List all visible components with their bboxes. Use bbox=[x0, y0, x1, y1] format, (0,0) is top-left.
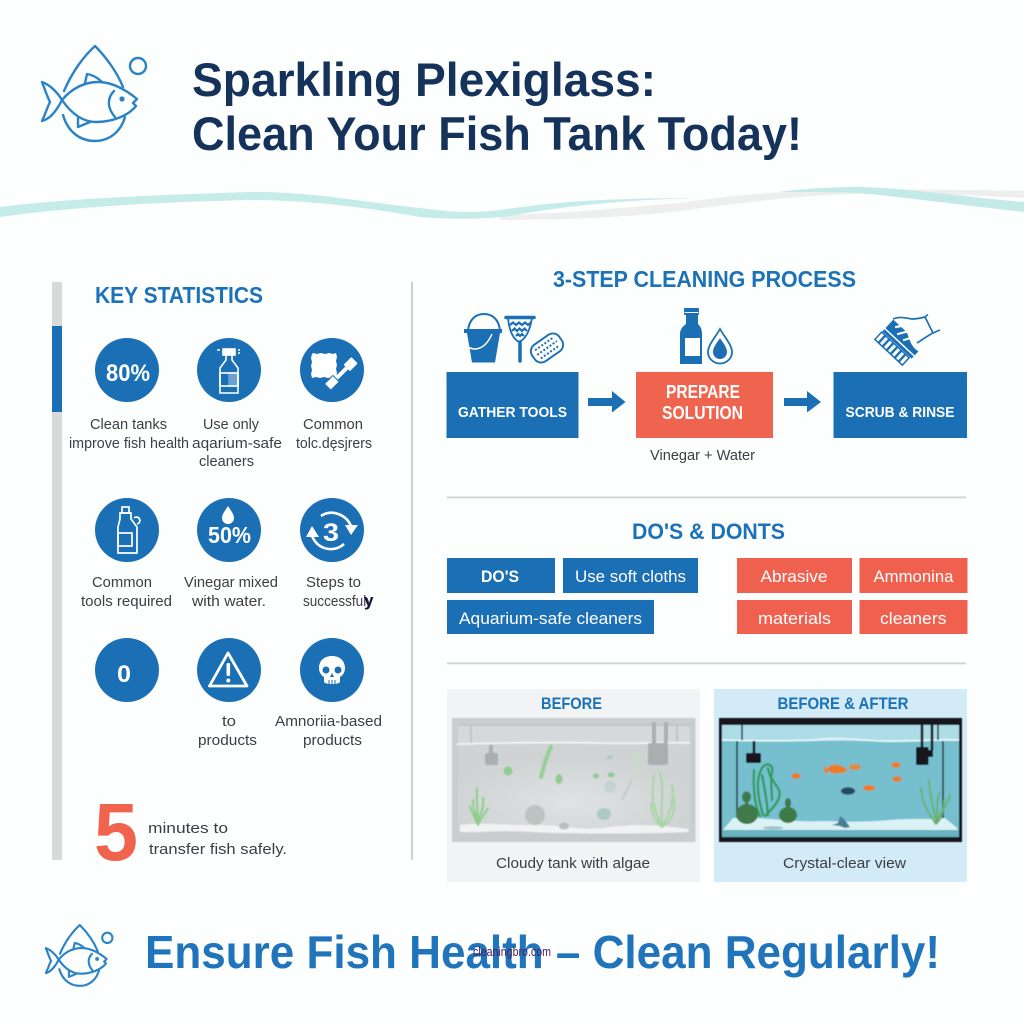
icon: vinegar bottle bbox=[680, 308, 702, 364]
stat: 80% clean tanks: 80% bbox=[106, 360, 150, 387]
stat: common tools required: Common bbox=[92, 574, 152, 591]
stat: warning products: to bbox=[222, 713, 236, 730]
panel: key statistics bbox=[52, 282, 382, 878]
do: soft cloths bbox=[563, 558, 698, 593]
callout: 5 minutes: transfer fish safely. bbox=[149, 841, 287, 858]
title: Clean Your Fish Tank Today! bbox=[192, 107, 802, 160]
stat: aquarium-safe cleaners: cleaners bbox=[199, 453, 254, 470]
don't: abrasive: Abrasive bbox=[760, 567, 828, 586]
callout: 5 minutes: 5 bbox=[94, 787, 138, 878]
callout: 5 minutes bbox=[94, 787, 287, 878]
caption: cloudy tank: Cloudy tank with algae bbox=[496, 855, 650, 872]
wave divider bbox=[0, 187, 1024, 220]
stat: common tools required: tools required bbox=[81, 593, 172, 610]
stat: 80% clean tanks: improve fish health bbox=[69, 435, 189, 452]
image: clear tank bbox=[719, 718, 962, 842]
don't: ammonina bbox=[860, 558, 968, 593]
step box: gather tools bbox=[446, 372, 578, 438]
title: Sparkling Plexiglass: bbox=[192, 53, 656, 106]
step box: gather tools: GATHER TOOLS bbox=[458, 404, 567, 421]
stat: common tools desired: Common bbox=[303, 416, 363, 433]
stat: common tools desired: tolc.dęsjrers bbox=[296, 435, 372, 452]
panel: before bbox=[447, 689, 700, 882]
don't: abrasive bbox=[737, 558, 852, 593]
don't: cleaners: cleaners bbox=[880, 609, 946, 628]
panel: do's and don'ts bbox=[447, 519, 968, 634]
icon: bucket bbox=[464, 314, 502, 362]
icon: net bbox=[506, 318, 534, 361]
heading: key statistics: KEY STATISTICS bbox=[95, 282, 263, 308]
stat: 3 steps to success bbox=[300, 498, 374, 610]
image: cloudy tank bbox=[452, 718, 696, 842]
stat: 3 steps to success: y bbox=[364, 591, 374, 610]
do: label bbox=[447, 558, 555, 593]
stat: ammonia-based products: products bbox=[303, 732, 362, 749]
panel: 3-step cleaning process bbox=[446, 266, 967, 464]
step box: prepare solution: PREPARE bbox=[666, 382, 740, 402]
do: aquarium-safe cleaners bbox=[447, 600, 654, 634]
stat: 50% vinegar: with water. bbox=[191, 593, 266, 610]
sidebar progress bar bbox=[52, 282, 62, 860]
stat: ammonia-based products bbox=[275, 638, 382, 749]
step box: scrub and rinse bbox=[834, 372, 967, 438]
heading: before and after: BEFORE & AFTER bbox=[778, 695, 909, 713]
do: label: DO'S bbox=[481, 567, 519, 586]
stat: 3 steps to success: successfuly bbox=[303, 593, 373, 610]
stat: aquarium-safe cleaners bbox=[192, 338, 282, 470]
stat: ammonia-based products: Amnoriia-based bbox=[275, 713, 382, 730]
don't: materials: materials bbox=[758, 609, 831, 628]
arrow: step 2 to 3 bbox=[784, 391, 821, 412]
heading: process: 3-STEP CLEANING PROCESS bbox=[553, 266, 856, 292]
icon: sponge bbox=[528, 330, 566, 366]
stat: zero bbox=[95, 638, 159, 702]
stat: warning products: products bbox=[198, 732, 257, 749]
step box: prepare solution: SOLUTION bbox=[662, 403, 743, 423]
stat: aquarium-safe cleaners: Use only bbox=[203, 416, 259, 433]
heading: before: BEFORE bbox=[541, 695, 602, 713]
do: aquarium-safe cleaners: Aquarium-safe cleaners bbox=[459, 609, 642, 628]
watermark: cleaningbro.com bbox=[473, 945, 551, 959]
caption: crystal-clear view: Crystal-clear view bbox=[783, 855, 906, 872]
don't: ammonina: Ammonina bbox=[874, 567, 954, 586]
callout: 5 minutes: minutes to bbox=[148, 820, 228, 837]
stat: 50% vinegar: 50% bbox=[208, 522, 251, 548]
don't: cleaners bbox=[860, 600, 968, 634]
don't: materials bbox=[737, 600, 852, 634]
stat: 50% vinegar bbox=[184, 498, 278, 610]
step box: scrub and rinse: SCRUB & RINSE bbox=[846, 404, 954, 421]
logo: fish in water drop bbox=[42, 46, 146, 141]
icon: water drop bbox=[708, 329, 732, 364]
stat: 3 steps to success: 3 bbox=[323, 519, 339, 547]
stat: 80% clean tanks bbox=[69, 338, 189, 452]
title bbox=[192, 53, 802, 160]
stat: common tools desired bbox=[296, 338, 372, 452]
stat: 80% clean tanks: Clean tanks bbox=[90, 416, 167, 433]
footer logo: fish in water drop bbox=[46, 925, 112, 986]
do: soft cloths: Use soft cloths bbox=[575, 567, 686, 586]
footer slogan: Ensure Fish Health – Clean Regularly! bbox=[145, 926, 940, 978]
stat: warning products bbox=[197, 638, 261, 749]
stat: zero: 0 bbox=[117, 661, 131, 688]
arrow: step 1 to 2 bbox=[588, 391, 626, 412]
stat: 50% vinegar: Vinegar mixed bbox=[184, 574, 278, 591]
stat: common tools required bbox=[81, 498, 172, 610]
heading: do's and donts: DO'S & DONTS bbox=[632, 519, 785, 544]
panel: before and after bbox=[714, 689, 967, 882]
stat: aquarium-safe cleaners: aqarium-safe bbox=[192, 435, 282, 452]
stat: 3 steps to success: Steps to bbox=[306, 574, 361, 591]
caption: vinegar plus water: Vinegar + Water bbox=[650, 447, 755, 464]
icon: hand with scrub brush bbox=[875, 314, 940, 367]
step box: prepare solution bbox=[636, 372, 773, 438]
